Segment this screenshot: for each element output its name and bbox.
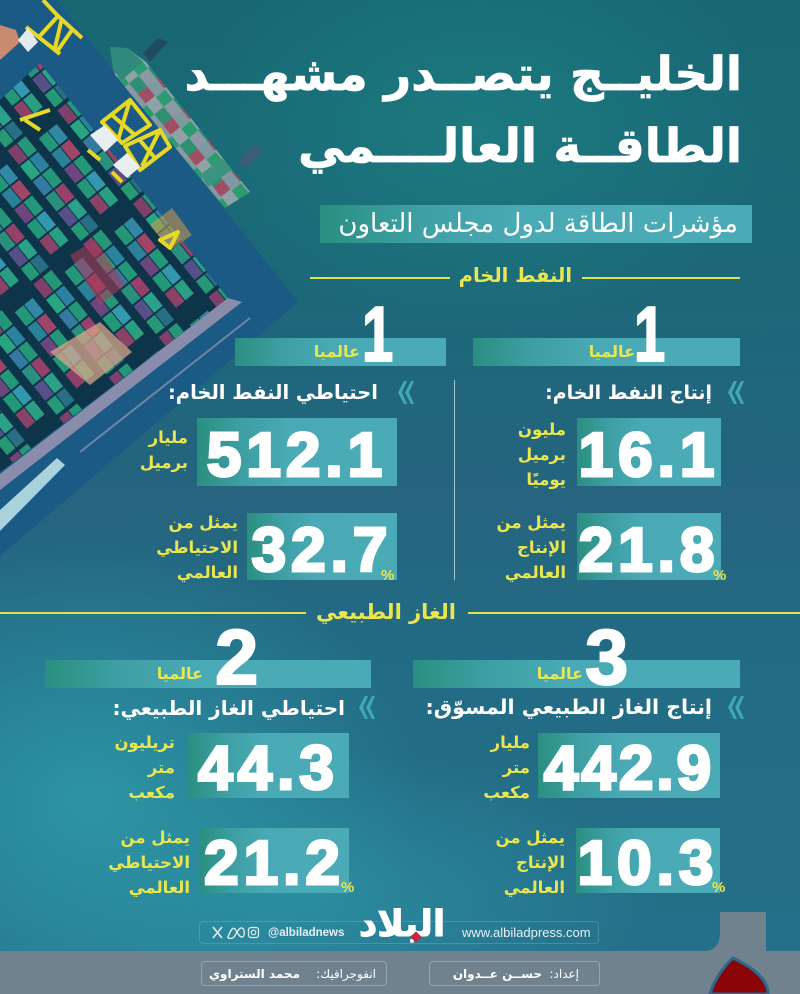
share value: 21.8 [579,516,719,585]
panel: oil reserves [140,290,446,585]
ship stern [200,158,232,187]
logo red diamond [410,931,422,943]
value unit [114,733,175,802]
share label: الإنتاج [516,853,565,872]
rank label: عالميا [537,664,583,683]
social handle: @albiladnews [268,927,344,939]
column divider [454,380,455,580]
container yard [0,63,228,472]
rank label: عالميا [314,342,360,361]
rank ribbon [235,338,446,366]
share box [577,513,721,580]
section heading: crude oil: النفط الخام [459,264,572,287]
value: 512.1 [207,421,387,490]
red emblem [710,958,768,994]
road edge strip [0,298,242,490]
share label: العالمي [505,563,566,582]
share label: الاحتياطي [156,538,238,557]
rank ribbon [45,660,371,688]
heading: إنتاج النفط الخام: [545,382,712,404]
title [184,47,742,174]
value unit [483,733,530,802]
value box [197,418,397,486]
value box [577,418,721,486]
white crane blocks [18,28,38,52]
percent sign: % [341,879,354,896]
credit: author: حســن عــدوان [453,967,542,981]
credit: author [429,961,600,986]
value unit: متر [148,758,175,777]
dock surface [0,0,298,556]
pink lit containers [70,240,125,305]
logo: البلاد [359,904,445,945]
heading: احتياطي الغاز الطبيعي: [113,696,345,720]
value unit: برميل [518,445,566,464]
rank label: عالميا [589,342,635,361]
title: الطاقــة العالــــمي [298,119,742,174]
white quay strip [0,458,65,531]
photo: aerial view of container port [0,0,298,556]
panel: oil production [473,290,744,585]
title: الخليــج يتصــدر مشهـــد [184,47,742,102]
value unit: مليار [491,733,530,752]
share label [496,513,566,582]
percent sign: % [381,567,394,584]
share label [495,828,565,897]
share value: 10.3 [578,829,718,898]
value box [188,733,349,798]
value unit: برميل [140,453,188,472]
share box [576,828,720,893]
credit: designer [201,961,387,986]
share label: الإنتاج [517,538,566,557]
orange glow on yard [50,322,132,385]
chevron icon [728,381,744,404]
dock road light line [80,318,250,452]
value unit [140,428,188,472]
rank number: 2 [215,613,258,701]
rank number: 1 [634,290,665,378]
footer band with notch [0,912,800,994]
website: www.albiladpress.com [462,925,591,940]
share label: يمثل من [496,513,566,532]
rank label: عالميا [157,664,203,683]
share label: العالمي [177,563,238,582]
value unit: متر [503,758,530,777]
footer social and website frame [199,921,599,944]
rank number: 3 [585,613,628,701]
container ship [110,47,250,208]
value: 16.1 [579,421,719,490]
share label [108,828,190,897]
value: 44.3 [198,734,339,803]
subtitle ribbon: مؤشرات الطاقة لدول مجلس التعاون [338,209,738,239]
heading: احتياطي النفط الخام: [168,381,378,404]
orange glow near quay [150,208,192,250]
ship bow [110,47,143,80]
value unit: مكعب [483,783,530,802]
rank ribbon [413,660,740,688]
panel: gas production [413,613,744,898]
chevron icon [728,696,744,719]
value: 442.9 [544,734,714,803]
share label: يمثل من [168,513,238,532]
value unit: مكعب [128,783,175,802]
tug boats [238,144,262,168]
share label: العالمي [129,878,190,897]
rank number: 1 [362,290,393,378]
yard top-left glow [0,25,20,60]
social icons [212,926,260,939]
credit: designer: انفوجرافيك: [316,967,376,981]
value box [538,733,720,798]
share box [200,828,349,893]
share value: 21.2 [204,829,345,898]
panel: gas reserves [45,613,375,898]
share label [156,513,238,582]
heading: إنتاج الغاز الطبيعي المسوّق: [425,695,712,719]
value unit: تريليون [114,733,175,752]
share label: يمثل من [495,828,565,847]
share label: يمثل من [120,828,190,847]
percent sign: % [713,567,726,584]
credit: author: إعداد: [549,967,579,981]
value unit [518,420,566,489]
value unit: مليار [149,428,188,447]
yellow cranes [20,0,178,248]
value unit: مليون [518,420,566,439]
rank ribbon [473,338,740,366]
value unit: يوميًا [526,470,566,489]
chevron icon [359,696,375,719]
share label: الاحتياطي [108,853,190,872]
chevron icon [398,381,414,404]
credit: designer: محمد الستراوي [209,967,300,981]
percent sign: % [712,879,725,896]
section heading: natural gas: الغاز الطبيعي [316,600,456,624]
share box [247,513,397,580]
share value: 32.7 [252,516,392,585]
share label: العالمي [504,878,565,897]
